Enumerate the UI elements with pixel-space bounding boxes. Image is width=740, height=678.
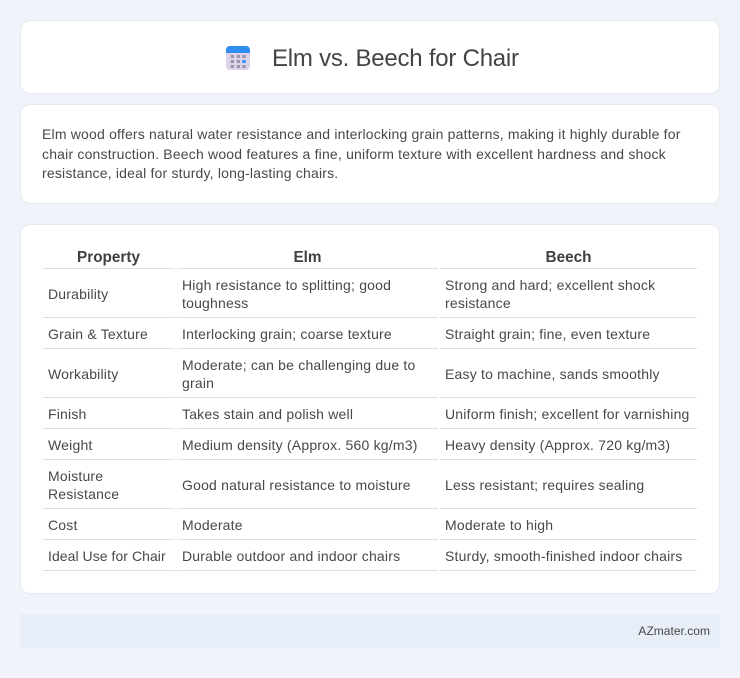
row: Moisture Resistance: Moisture bbox=[48, 468, 103, 484]
cell: Workability Elm: grain bbox=[182, 375, 214, 391]
cell: Grain Elm: Interlocking grain; coarse texture bbox=[182, 326, 392, 342]
cell: Weight Elm: Medium density (Approx. 560 kg/m3) bbox=[182, 437, 418, 453]
cell: Cost Beech: Moderate to high bbox=[445, 517, 553, 533]
footer credit: AZmater.com bbox=[638, 624, 710, 638]
footer bar bbox=[20, 614, 720, 648]
cell: Weight Beech: Heavy density (Approx. 720 kg/m3) bbox=[445, 437, 670, 453]
text block: summary bbox=[42, 126, 681, 181]
text block: summary: chair construction. Beech wood features a fine, uniform texture with excellent hardness and shock bbox=[42, 146, 666, 162]
row: Grain & Texture: Grain & Texture bbox=[48, 326, 148, 342]
panel: comparison table bbox=[20, 224, 720, 594]
title: Elm vs. Beech for Chair bbox=[272, 45, 519, 72]
cell: Durability Elm: High resistance to splitting; good bbox=[182, 277, 391, 293]
cell: Ideal Use Beech: Sturdy, smooth-finished indoor chairs bbox=[445, 548, 682, 564]
cell: Workability Elm: Moderate; can be challenging due to bbox=[182, 357, 416, 373]
cell: Workability Elm bbox=[182, 357, 416, 391]
icon: calendar bbox=[226, 46, 250, 70]
cell: Moisture Beech: Less resistant; requires sealing bbox=[445, 477, 644, 493]
row: Durability: Durability bbox=[48, 286, 108, 302]
cell: Finish Elm: Takes stain and polish well bbox=[182, 406, 353, 422]
row: Moisture Resistance bbox=[48, 468, 119, 502]
panel: title card bbox=[20, 20, 720, 94]
row: Weight: Weight bbox=[48, 437, 93, 453]
cell: Finish Beech: Uniform finish; excellent for varnishing bbox=[445, 406, 690, 422]
row: Moisture Resistance: Resistance bbox=[48, 486, 119, 502]
cell: Durability Beech: Strong and hard; excellent shock bbox=[445, 277, 655, 293]
row: Workability: Workability bbox=[48, 366, 118, 382]
text block: summary: Elm wood offers natural water resistance and interlocking grain patterns, making it highly durable for bbox=[42, 126, 681, 142]
cell: Ideal Use Elm: Durable outdoor and indoor chairs bbox=[182, 548, 400, 564]
panel: summary bbox=[20, 104, 720, 204]
cell: Durability Beech bbox=[445, 277, 656, 311]
header: Beech: Beech bbox=[546, 249, 591, 266]
row: Finish: Finish bbox=[48, 406, 87, 422]
row: Ideal Use: Ideal Use for Chair bbox=[48, 548, 166, 564]
row: Cost: Cost bbox=[48, 517, 78, 533]
cell: Workability Beech: Easy to machine, sands smoothly bbox=[445, 366, 660, 382]
cell: Cost Elm: Moderate bbox=[182, 517, 243, 533]
text block: summary: resistance, ideal for sturdy, long-lasting chairs. bbox=[42, 165, 338, 181]
cell: Durability Beech: resistance bbox=[445, 295, 511, 311]
cell: Grain Beech: Straight grain; fine, even texture bbox=[445, 326, 650, 342]
header: Property: Property bbox=[77, 249, 140, 266]
cell: Moisture Elm: Good natural resistance to moisture bbox=[182, 477, 411, 493]
cell: Durability Elm bbox=[182, 277, 391, 311]
cell: Durability Elm: toughness bbox=[182, 295, 248, 311]
header: Elm: Elm bbox=[293, 249, 322, 266]
